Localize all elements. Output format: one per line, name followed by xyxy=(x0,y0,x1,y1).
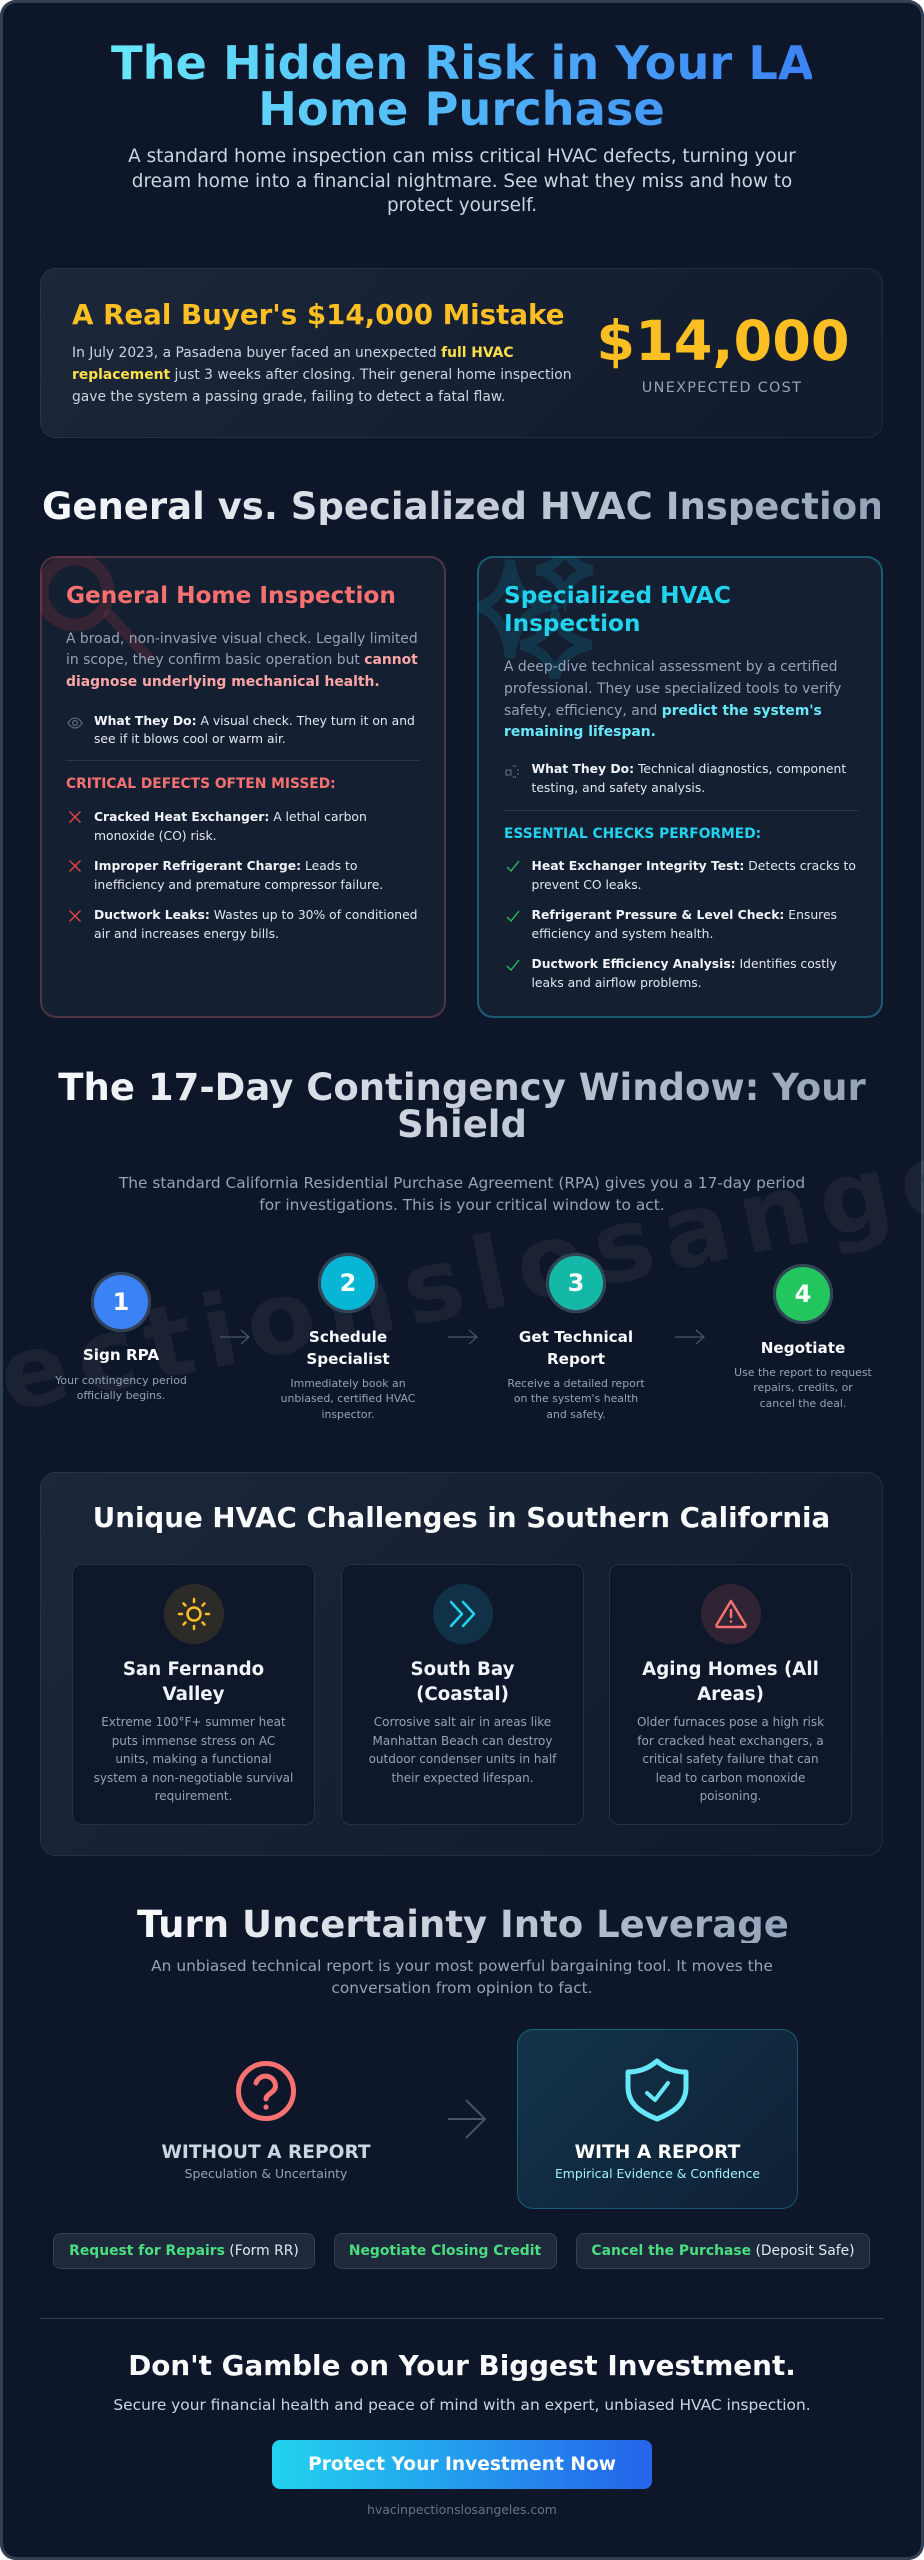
step description: inspector. xyxy=(321,1408,375,1421)
intro text: A standard home inspection can miss critical HVAC defects, turning your xyxy=(128,146,796,167)
step description: and safety. xyxy=(546,1408,606,1421)
panel description: diagnose underlying mechanical health. xyxy=(66,674,380,690)
big number label: UNEXPECTED COST xyxy=(642,380,802,396)
defect item: Improper Refrigerant Charge: Leads to xyxy=(94,859,357,873)
section label: essential checks: ESSENTIAL CHECKS PERFORMED: xyxy=(504,826,761,842)
check item xyxy=(532,859,856,892)
step title: Schedule xyxy=(309,1328,387,1346)
what they do: see if it blows cool or warm air. xyxy=(94,732,286,746)
step title xyxy=(306,1328,390,1368)
without a report xyxy=(126,2055,406,2190)
what they do: testing, and safety analysis. xyxy=(532,781,705,795)
icon: shield check xyxy=(622,2057,692,2123)
panel description: remaining lifespan. xyxy=(504,724,656,740)
title xyxy=(111,40,812,132)
check item: efficiency and system health. xyxy=(532,927,713,941)
step description: cancel the deal. xyxy=(760,1397,846,1410)
panel heading: General Home Inspection xyxy=(66,582,396,609)
arrow xyxy=(448,1330,478,1344)
panel description xyxy=(504,659,841,740)
card: san fernando valley xyxy=(72,1564,315,1825)
icon: diagnostics xyxy=(506,764,519,778)
arrow xyxy=(675,1330,705,1344)
closing text: Secure your financial health and peace of mind with an expert, unbiased HVAC inspection. xyxy=(113,2396,811,2414)
icon: check mark xyxy=(506,960,520,971)
icon: x mark xyxy=(69,811,81,823)
intro text: protect yourself. xyxy=(387,195,537,216)
heading: contingency window xyxy=(58,1069,866,1143)
heading: comparison: General vs. Specialized HVAC Inspection xyxy=(42,485,883,528)
sublabel: Empirical Evidence & Confidence xyxy=(555,2166,760,2181)
what they do: What They Do: A visual check. They turn it on and xyxy=(94,714,415,728)
arrow xyxy=(446,2099,488,2139)
defect item xyxy=(94,810,367,843)
card text: their expected lifespan. xyxy=(391,1770,534,1784)
panel heading: Specialized HVAC xyxy=(504,582,731,609)
defect item: Ductwork Leaks: Wastes up to 30% of conditioned xyxy=(94,908,418,922)
arrow xyxy=(220,1330,250,1344)
step number xyxy=(546,1253,606,1313)
card text: lead to carbon monoxide xyxy=(656,1770,805,1784)
step title: Specialist xyxy=(306,1350,390,1368)
button: protect your investment xyxy=(272,2440,652,2489)
big number: $14,000 xyxy=(596,309,850,374)
card text: units, making a functional xyxy=(115,1752,272,1766)
check item: prevent CO leaks. xyxy=(532,878,642,892)
step description: Receive a detailed report xyxy=(507,1377,645,1390)
card title: Aging Homes (All xyxy=(642,1659,819,1680)
check item xyxy=(532,957,837,990)
step 1 xyxy=(55,1272,187,1402)
step title: Get Technical xyxy=(519,1328,633,1346)
card title xyxy=(609,1658,852,1707)
website: hvacinpectionslosangeles.com xyxy=(367,2502,557,2517)
button: protect your investment: Protect Your Investment Now xyxy=(308,2454,616,2475)
card text: Manhattan Beach can destroy xyxy=(373,1734,552,1748)
leverage intro text xyxy=(62,1956,862,1999)
icon: x mark xyxy=(69,860,81,872)
card text: puts immense stress on AC xyxy=(112,1734,275,1748)
callout body: gave the system a passing grade, failing to detect a fatal flaw. xyxy=(72,389,505,405)
icon: eye xyxy=(68,718,82,728)
step description: unbiased, certified HVAC xyxy=(281,1392,415,1405)
check item: leaks and airflow problems. xyxy=(532,976,702,990)
defect item: air and increases energy bills. xyxy=(94,927,279,941)
panel: general home inspection xyxy=(40,556,446,1018)
card title xyxy=(123,1659,264,1704)
card title: (Coastal) xyxy=(416,1684,509,1704)
action: request for repairs xyxy=(53,2233,315,2269)
card text: poisoning. xyxy=(700,1789,761,1803)
defect item: monoxide (CO) risk. xyxy=(94,829,217,843)
step description: Use the report to request xyxy=(734,1366,872,1379)
step description: Immediately book an xyxy=(290,1377,406,1390)
icon: magnifier watermark xyxy=(40,556,154,662)
card text xyxy=(72,1713,315,1806)
card text: for cracked heat exchangers, a xyxy=(637,1734,824,1748)
step description xyxy=(734,1366,872,1410)
step description: on the system's health xyxy=(514,1392,638,1405)
step number: 4 xyxy=(795,1280,811,1308)
heading: leverage: Turn Uncertainty Into Leverage xyxy=(137,1903,789,1946)
card text xyxy=(609,1713,852,1806)
callout body xyxy=(72,345,571,405)
action: cancel purchase: Cancel the Purchase (Deposit Safe) xyxy=(591,2243,855,2259)
check item xyxy=(532,908,837,941)
panel description: A broad, non-invasive visual check. Legally limited xyxy=(66,630,418,646)
what they do xyxy=(532,762,846,795)
step number: 1 xyxy=(113,1288,129,1316)
panel: southern california challenges xyxy=(40,1472,883,1856)
step number xyxy=(91,1272,151,1332)
sublabel: Speculation & Uncertainty xyxy=(185,2166,347,2181)
contingency intro text xyxy=(118,1174,805,1214)
step description xyxy=(281,1377,415,1421)
icon: x mark xyxy=(69,910,81,922)
intro text: dream home into a financial nightmare. See what they miss and how to xyxy=(132,171,792,192)
icon: check mark xyxy=(506,910,520,922)
card text: Corrosive salt air in areas like xyxy=(374,1715,551,1729)
card text: outdoor condenser units in half xyxy=(369,1752,556,1766)
card title: Valley xyxy=(162,1684,224,1704)
what they do: What They Do: Technical diagnostics, component xyxy=(532,762,846,776)
contingency intro text: The standard California Residential Purchase Agreement (RPA) gives you a 17-day period xyxy=(119,1174,805,1192)
card title: Areas) xyxy=(697,1684,764,1704)
check item: Heat Exchanger Integrity Test: Detects cracks to xyxy=(532,859,856,873)
step 2 xyxy=(281,1253,415,1421)
card title: South Bay xyxy=(411,1659,514,1680)
icon: warning triangle xyxy=(700,1584,760,1644)
card text: system a non-negotiable survival xyxy=(94,1770,293,1784)
card text: Extreme 100°F+ summer heat xyxy=(101,1715,286,1729)
step 3 xyxy=(507,1253,645,1421)
defect item: inefficiency and premature compressor failure. xyxy=(94,878,383,892)
what they do xyxy=(94,714,415,746)
panel description: in scope, they confirm basic operation but cannot xyxy=(66,652,418,668)
defect item xyxy=(94,908,418,941)
leverage intro text: conversation from opinion to fact. xyxy=(331,1978,593,1996)
card text: critical safety failure that can xyxy=(642,1752,819,1766)
step 4 xyxy=(734,1264,872,1410)
panel description: professional. They use specialized tools to verify xyxy=(504,681,841,697)
action: negotiate credit: Negotiate Closing Credit xyxy=(349,2243,541,2259)
check item: Refrigerant Pressure & Level Check: Ensures xyxy=(532,908,837,922)
timeline xyxy=(55,1253,872,1421)
closing heading: Don't Gamble on Your Biggest Investment. xyxy=(128,2349,796,2382)
step description xyxy=(507,1377,645,1421)
action: cancel purchase xyxy=(576,2233,870,2269)
check item: Ductwork Efficiency Analysis: Identifies costly xyxy=(532,957,837,971)
step title: Sign RPA xyxy=(83,1346,159,1364)
section label: defects missed: CRITICAL DEFECTS OFTEN MISSED: xyxy=(66,776,336,792)
step title: Negotiate xyxy=(761,1339,845,1357)
card text xyxy=(341,1713,584,1787)
step number: 2 xyxy=(340,1269,356,1297)
panel: buyer's mistake callout xyxy=(40,268,883,438)
step description: Your contingency period xyxy=(55,1374,187,1387)
card: south bay xyxy=(341,1564,584,1825)
card text: requirement. xyxy=(155,1789,232,1803)
action: request for repairs: Request for Repairs (Form RR) xyxy=(69,2243,299,2259)
card title: San Fernando xyxy=(123,1659,264,1680)
panel heading: Unique HVAC Challenges in Southern California xyxy=(93,1501,830,1534)
panel description: safety, efficiency, and predict the system's xyxy=(504,703,822,719)
with a report xyxy=(517,2029,798,2209)
icon: sun xyxy=(164,1584,224,1644)
icon: double chevron xyxy=(432,1584,492,1644)
step description xyxy=(55,1374,187,1402)
icon: sparkle watermark xyxy=(477,556,593,679)
panel heading: Inspection xyxy=(504,610,640,637)
defect item: Cracked Heat Exchanger: A lethal carbon xyxy=(94,810,367,824)
step title xyxy=(519,1328,633,1368)
label: WITH A REPORT xyxy=(575,2142,740,2163)
panel description: A deep-dive technical assessment by a certified xyxy=(504,659,837,675)
title: The Hidden Risk in Your LA xyxy=(111,36,814,90)
step number xyxy=(773,1264,833,1324)
step title: Report xyxy=(547,1350,605,1368)
contingency intro text: for investigations. This is your critical window to act. xyxy=(259,1196,665,1214)
card: aging homes xyxy=(609,1564,852,1825)
step number xyxy=(318,1253,378,1313)
action: negotiate credit xyxy=(334,2233,556,2269)
panel heading xyxy=(504,582,731,637)
step description: repairs, credits, or xyxy=(753,1381,853,1394)
label: WITHOUT A REPORT xyxy=(161,2142,371,2163)
card title xyxy=(341,1658,584,1707)
icon: question mark xyxy=(236,2061,296,2121)
card text: Older furnaces pose a high risk xyxy=(637,1715,824,1729)
step number: 3 xyxy=(568,1269,584,1297)
title: Home Purchase xyxy=(258,82,665,136)
heading: contingency window: Shield xyxy=(397,1103,527,1146)
panel description xyxy=(66,630,418,690)
callout heading: A Real Buyer's $14,000 Mistake xyxy=(72,298,565,331)
icon: check mark xyxy=(506,860,520,872)
heading: contingency window: The 17-Day Contingency Window: Your xyxy=(58,1066,866,1109)
callout body: replacement just 3 weeks after closing. Their general home inspection xyxy=(72,367,571,383)
intro text xyxy=(128,146,796,216)
callout body: In July 2023, a Pasadena buyer faced an unexpected full HVAC xyxy=(72,345,514,361)
panel: specialized hvac inspection xyxy=(477,556,883,1018)
defect item xyxy=(94,859,383,892)
leverage intro text: An unbiased technical report is your most powerful bargaining tool. It moves the xyxy=(151,1957,773,1975)
step description: officially begins. xyxy=(77,1389,165,1402)
